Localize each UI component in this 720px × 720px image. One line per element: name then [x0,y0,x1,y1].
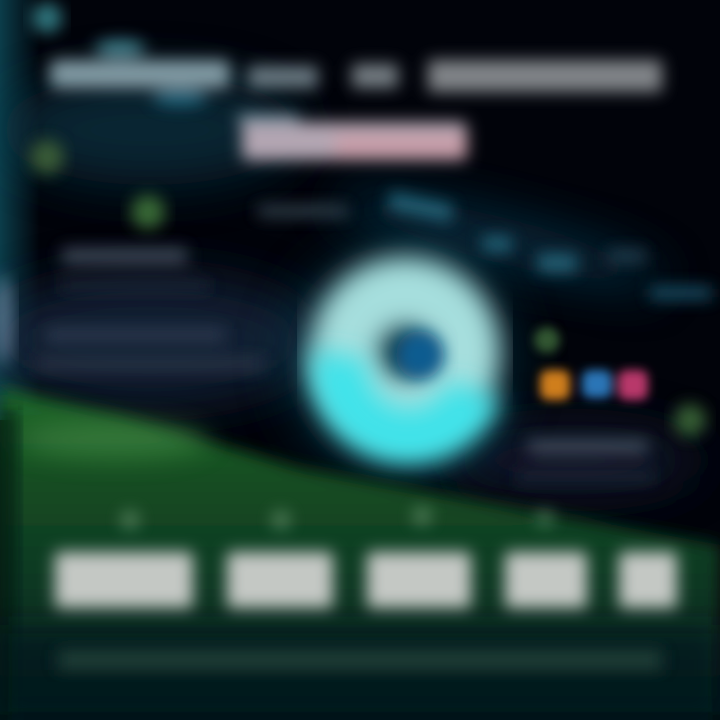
subtitle [238,114,467,160]
box 1 [55,552,193,608]
box 3 [367,552,471,608]
text block: left column [35,248,265,370]
icons: small markers above boxes [121,507,553,529]
footer text band [58,650,662,670]
icon: green circle right [674,404,706,436]
icon: top-left cyan circle [32,3,62,33]
box 5 [619,552,677,608]
box 2 [227,552,333,608]
icon: green circle left [30,140,64,174]
legend: coloured swatches [540,370,648,400]
icon: green circle upper left column [131,195,165,229]
text block: right caption [515,440,655,481]
box 4 [505,552,587,608]
panel: five light boxes [55,552,677,608]
icon: small green circle [534,327,560,353]
text block: diagonal caption [258,192,712,299]
green hill panel [0,388,720,720]
title [50,40,662,106]
chart: cyan donut [285,245,515,475]
